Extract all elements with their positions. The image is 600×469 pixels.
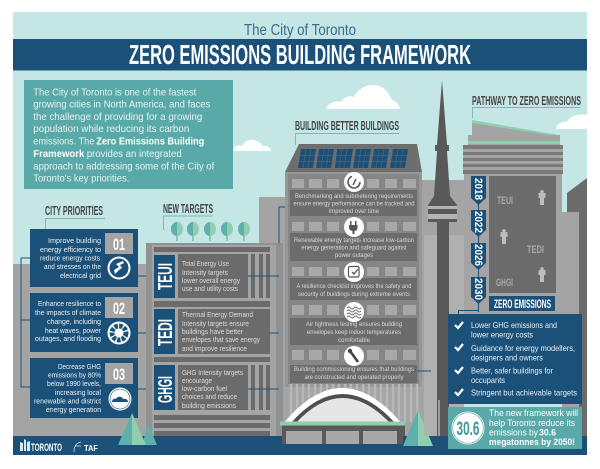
callout: 30.6 megatonnes: 30.6 bbox=[456, 419, 480, 440]
strategy: resilience checklist: security of buildings during extreme events bbox=[298, 292, 410, 298]
strategy: renewable energy: energy generation and safeguard against bbox=[302, 246, 407, 252]
priority 01 bbox=[30, 229, 138, 287]
logo: TAF bbox=[74, 442, 98, 453]
target TEUI bbox=[154, 254, 248, 298]
priority 02 bbox=[30, 293, 138, 352]
heading: building better buildings: BUILDING BETTER BUILDINGS bbox=[295, 118, 399, 133]
target TEUI: Total Energy Use bbox=[182, 259, 229, 268]
target TEDI bbox=[154, 309, 270, 354]
strategy: benchmarking: Benchmarking and submetering requirements bbox=[295, 194, 413, 200]
cloud right bbox=[556, 114, 587, 129]
skyline background bbox=[13, 180, 464, 436]
intro text block: the challenge of providing for a growing bbox=[33, 112, 203, 123]
priority 02: Enhance resilience to bbox=[38, 299, 101, 308]
text bands bbox=[290, 190, 417, 383]
callout: 30.6 megatonnes: The new framework will bbox=[489, 408, 578, 418]
target GHGI: choices and reduce bbox=[182, 392, 237, 401]
callout: 30.6 megatonnes: emissions by bbox=[489, 428, 538, 438]
priority 03: renewable and district bbox=[34, 396, 102, 406]
target GHGI: encourage bbox=[182, 376, 212, 385]
pathway tower: 2022 bbox=[472, 211, 484, 233]
intro text block: population while reducing its carbon bbox=[33, 124, 189, 135]
connector lines to targets bbox=[138, 207, 290, 389]
building better buildings tower bbox=[285, 144, 422, 387]
heading: city priorities bbox=[45, 203, 105, 230]
priority 01: energy efficiency to bbox=[40, 245, 101, 254]
target TEDI: TEDI bbox=[155, 319, 177, 346]
logo: Toronto: TORONTO bbox=[31, 442, 62, 454]
solar panels bbox=[297, 149, 409, 168]
trees row bbox=[171, 222, 250, 241]
target TEDI: buildings have better bbox=[182, 327, 244, 336]
labels in tower: TEUI bbox=[497, 195, 513, 207]
target GHGI: GHGI bbox=[155, 376, 177, 403]
footer bbox=[13, 436, 587, 455]
target TEDI: Intensity targets ensure bbox=[182, 319, 249, 328]
panel: zero emissions benefits: occupants bbox=[471, 375, 505, 385]
heading: pathway to zero emissions bbox=[472, 93, 581, 118]
heading: new targets: NEW TARGETS bbox=[163, 201, 213, 216]
year tags bbox=[471, 176, 486, 304]
strategy: commissioning: are constructed and operated properly bbox=[304, 375, 404, 381]
strategy: air tightness: envelopes keep indoor temperatures bbox=[307, 330, 401, 336]
intro text block: The City of Toronto is one of the fastest bbox=[33, 88, 196, 98]
logo: Toronto bbox=[20, 439, 62, 454]
callout: 30.6 megatonnes: help Toronto reduce its bbox=[489, 418, 575, 428]
panel: zero emissions benefits: Stringent but achievable targets bbox=[471, 388, 577, 398]
strategy: renewable energy bbox=[294, 217, 414, 259]
priority 01: and stresses on the bbox=[44, 262, 101, 271]
strategy: resilience checklist: A resilience checklist improves the safety and bbox=[296, 284, 412, 290]
target TEDI: Thermal Energy Demand bbox=[182, 310, 253, 319]
heading: city priorities: CITY PRIORITIES bbox=[45, 203, 103, 218]
strategy: benchmarking bbox=[294, 172, 414, 215]
connector lines over building bbox=[248, 276, 279, 389]
priority 03: below 1990 levels, bbox=[47, 379, 101, 388]
priority 02: change, including bbox=[47, 317, 101, 326]
callout: 30.6 megatonnes: 30.6 bbox=[539, 428, 556, 438]
target TEUI: use and utility costs bbox=[182, 284, 238, 293]
intro text block bbox=[24, 80, 233, 189]
strategy: benchmarking: ensure energy performance can be tracked and bbox=[294, 202, 414, 208]
priority 03: Decrease GHG bbox=[58, 362, 101, 371]
intro text block: provides an integrated bbox=[87, 149, 182, 160]
priority 01: Improve building bbox=[48, 236, 101, 245]
labels in tower bbox=[496, 195, 544, 289]
strategy: air tightness bbox=[306, 302, 402, 344]
panel: zero emissions benefits: designers and owners bbox=[471, 352, 543, 362]
panel: zero emissions benefits: Guidance for energy modellers, bbox=[471, 343, 575, 353]
intro text block: growing cities in North America, and faces bbox=[33, 100, 210, 110]
cloud top bbox=[326, 85, 400, 109]
intro text block: approach to addressing some of the City of bbox=[33, 162, 214, 172]
logo: TAF: TAF bbox=[84, 444, 98, 453]
priority 03: energy generation bbox=[46, 405, 101, 414]
target GHGI: low-carbon fuel bbox=[182, 384, 227, 393]
pathway tower: 2026 bbox=[472, 244, 484, 266]
priority 02: the impacts of climate bbox=[35, 308, 101, 317]
strategy: benchmarking: improved over time bbox=[329, 209, 380, 215]
pathway tower bbox=[458, 120, 587, 436]
pathway tower: 2030 bbox=[472, 278, 484, 300]
cloud left bbox=[233, 140, 271, 151]
strategy: commissioning bbox=[294, 346, 414, 381]
stripes under building bbox=[291, 384, 417, 422]
priority 01: electrical grid bbox=[60, 271, 101, 280]
priority 01: 01 bbox=[113, 235, 125, 254]
trees left bbox=[118, 413, 157, 445]
title: The City of Toronto bbox=[244, 22, 356, 39]
zero emissions label: ZERO EMISSIONS bbox=[494, 297, 551, 311]
icon: cloud bbox=[108, 388, 132, 410]
priority 03: 03 bbox=[113, 365, 125, 384]
strategy: renewable energy: Renewable energy targets increase low-carbon bbox=[294, 238, 414, 244]
people icons bbox=[500, 190, 546, 282]
target TEUI: Intensity targets bbox=[182, 268, 228, 277]
heading: new targets bbox=[163, 201, 213, 230]
labels in tower: TEDI bbox=[527, 244, 544, 256]
priority 02: outages, and flooding bbox=[35, 334, 101, 343]
priority 03: increasing local bbox=[55, 388, 101, 397]
CN tower bbox=[424, 80, 464, 436]
panel: zero emissions benefits: Lower GHG emissions and bbox=[471, 320, 557, 330]
panel: zero emissions benefits: lower energy costs bbox=[471, 330, 533, 340]
priority 03 bbox=[30, 358, 138, 418]
intro text block: Framework bbox=[33, 149, 85, 160]
panel: zero emissions benefits bbox=[448, 314, 582, 404]
intro text block: Zero Emissions Building bbox=[96, 136, 204, 148]
priority 02: 02 bbox=[113, 299, 125, 318]
icon: lightning bbox=[108, 256, 130, 280]
target GHGI: building emissions bbox=[182, 401, 236, 410]
priority 03: emissions by 80% bbox=[48, 370, 101, 380]
strategy: resilience checklist bbox=[296, 262, 412, 298]
strategy: air tightness: comfortable bbox=[338, 338, 371, 344]
zero emissions label bbox=[489, 296, 555, 311]
intro text block: Toronto's key priorities. bbox=[33, 174, 129, 184]
pathway tower: 2018 bbox=[472, 178, 484, 200]
check marks bbox=[455, 322, 463, 395]
callout: 30.6 megatonnes: megatonnes by 2050! bbox=[489, 437, 575, 447]
priority 02: heat waves, power bbox=[45, 326, 101, 335]
callout: 30.6 megatonnes bbox=[448, 407, 582, 449]
strategy: commissioning: Building commissioning ensures that buildings bbox=[294, 367, 414, 373]
target GHGI: GHG Intensity targets bbox=[182, 368, 243, 377]
target TEDI: and improve resilience bbox=[182, 344, 247, 353]
tree right bbox=[403, 410, 433, 446]
panel: zero emissions benefits: Better, safer buildings for bbox=[471, 366, 553, 376]
target TEUI: lower overall energy bbox=[182, 276, 240, 285]
target TEUI: TEUI bbox=[155, 263, 177, 290]
intro text block: emissions. The bbox=[33, 136, 95, 148]
strategy: renewable energy: power outages bbox=[335, 253, 373, 259]
target GHGI bbox=[154, 365, 248, 410]
priority 01: reduce energy costs bbox=[40, 254, 100, 262]
icon: resilience ring bbox=[108, 322, 130, 344]
labels in tower: GHGI bbox=[496, 277, 513, 289]
heading: building better buildings bbox=[295, 118, 399, 145]
strategy: air tightness: Air tightness testing ensures building bbox=[306, 322, 402, 328]
stadium dome bbox=[280, 388, 405, 445]
connector from building to panel bbox=[417, 370, 431, 372]
priorities connector bbox=[21, 258, 30, 387]
target TEDI: envelopes that save energy bbox=[182, 335, 260, 344]
new targets building bbox=[146, 243, 283, 436]
